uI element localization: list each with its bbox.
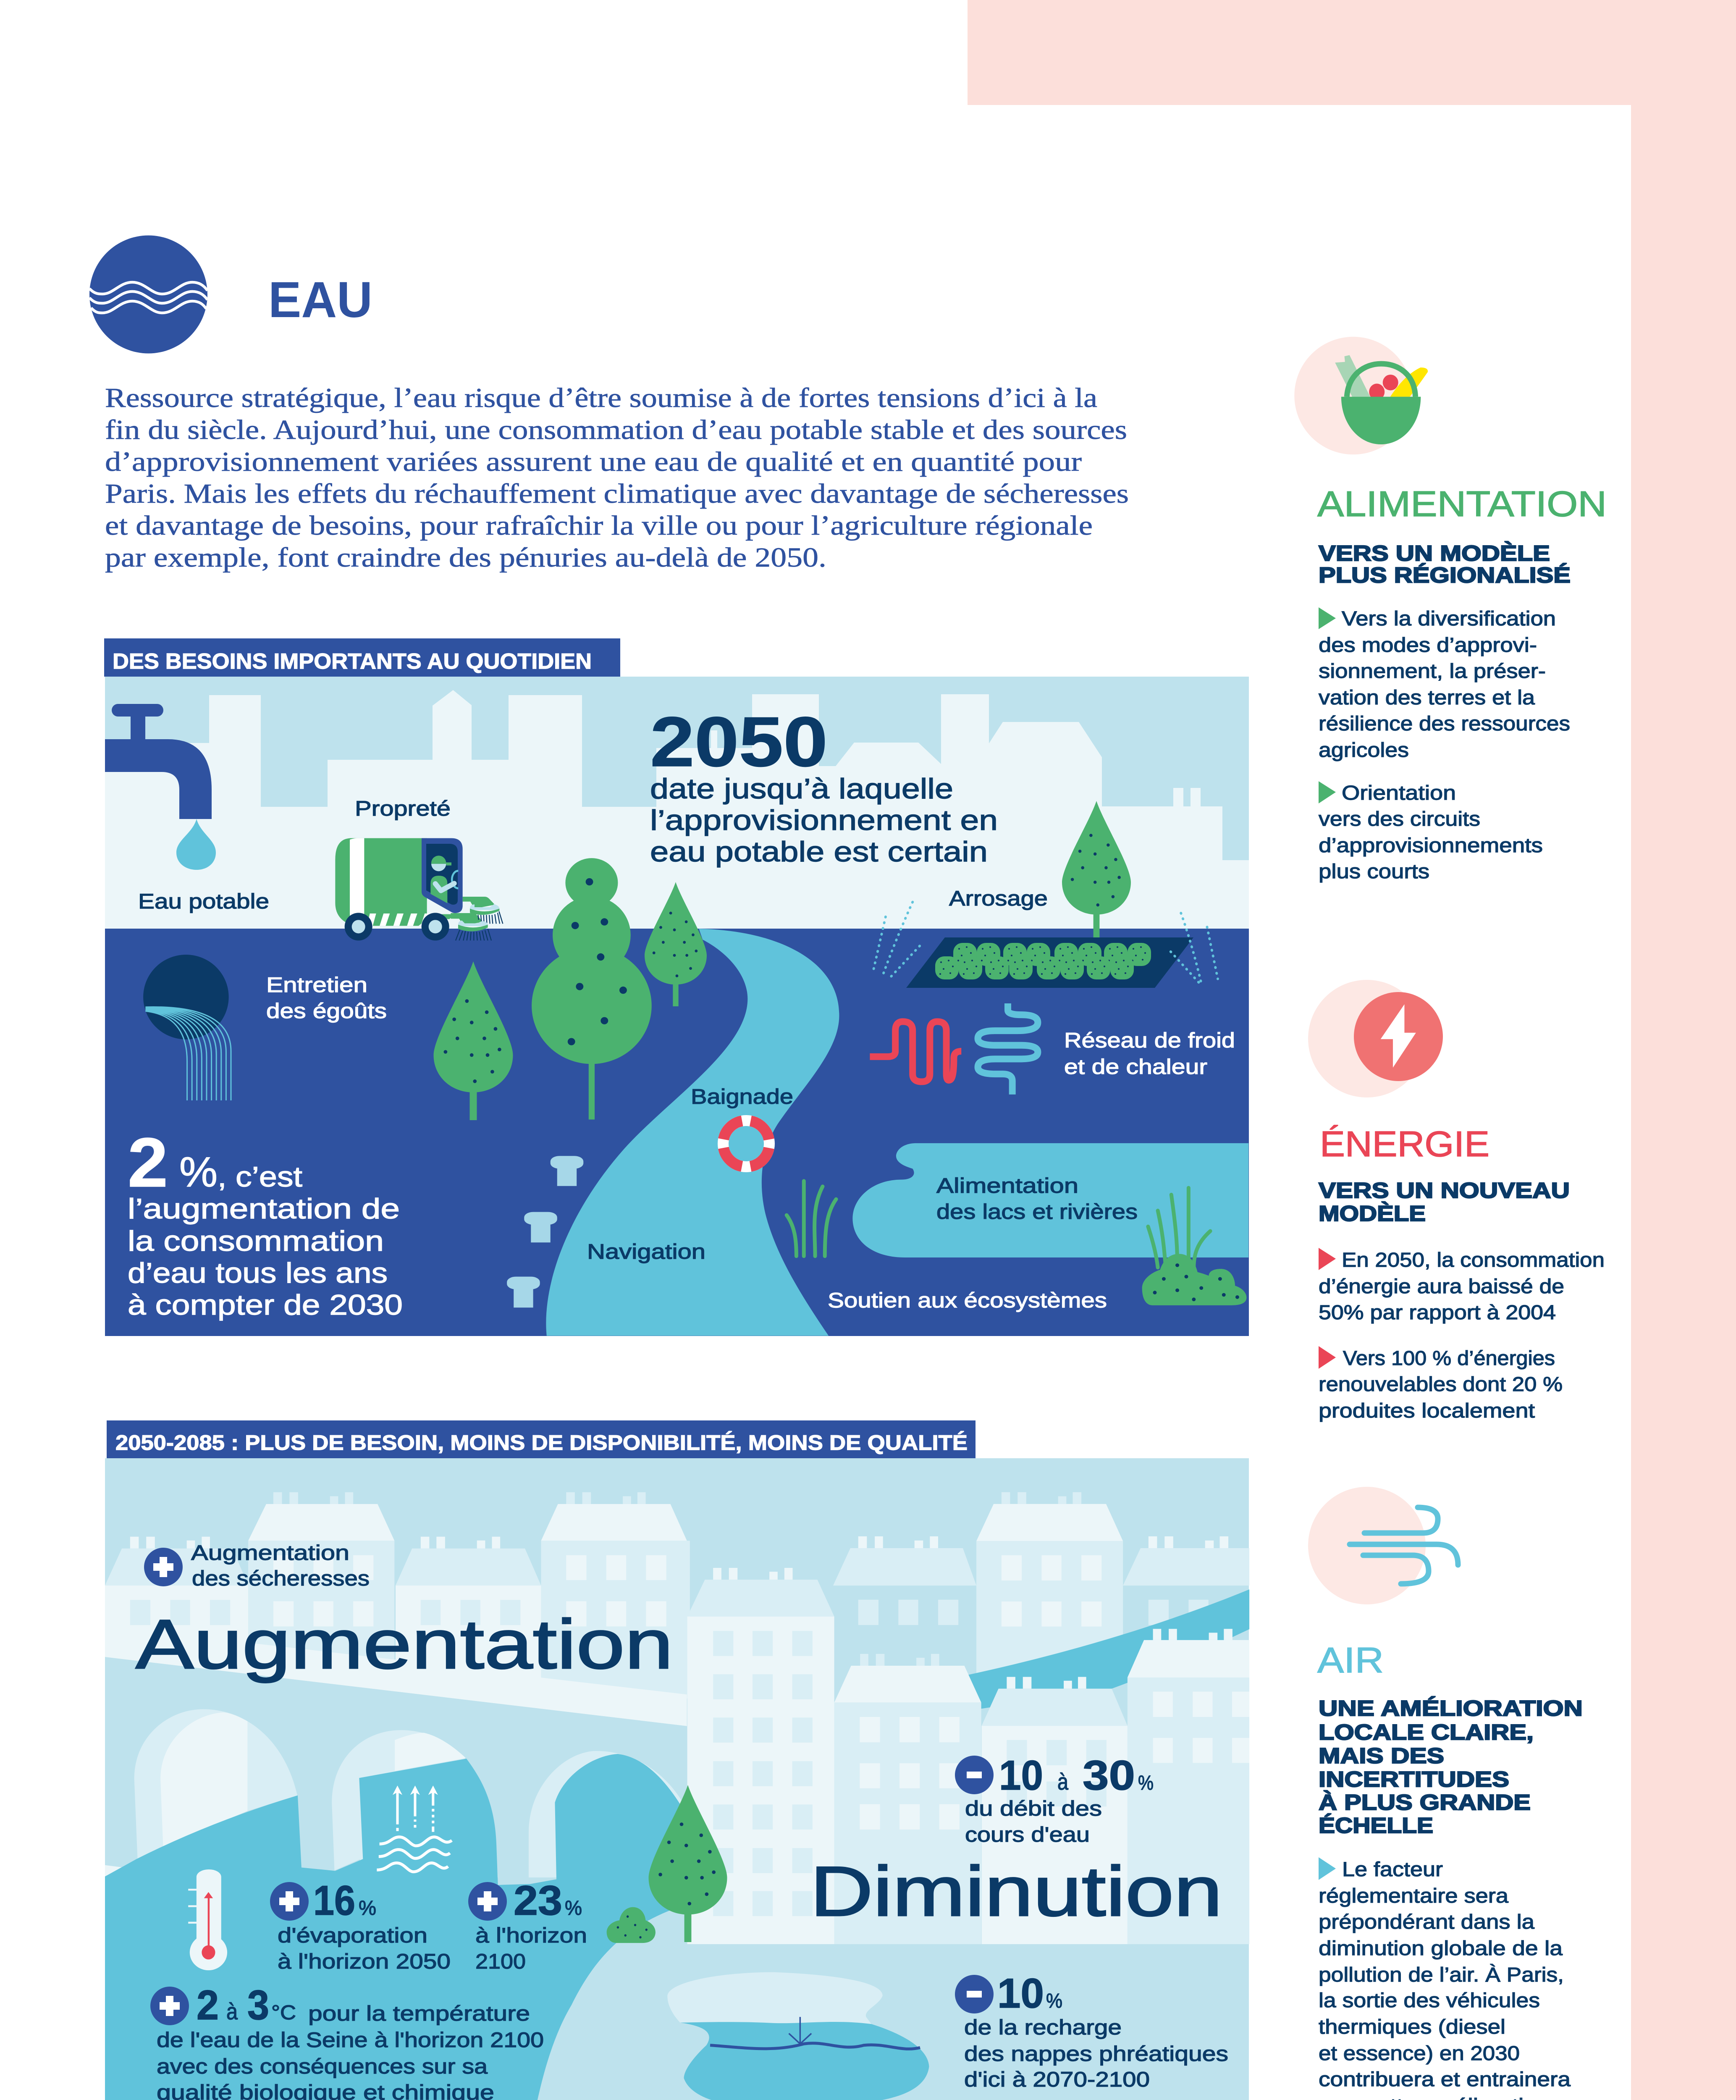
- label: Entretien des égoûts: des égoûts: [266, 999, 387, 1023]
- stat: augmentation des sécheresses: des sécheresses: [192, 1567, 370, 1590]
- river: [546, 929, 839, 1336]
- stat: plus 23 %: %: [565, 1897, 582, 1919]
- stat: 2050: [650, 702, 998, 868]
- subheading: amélioration locale: UNE AMÉLIORATION: [1319, 1696, 1583, 1721]
- icon: water circle: [89, 235, 207, 354]
- bullet: facteur réglementaire: réglementaire sera: [1319, 1885, 1508, 1907]
- bullet: facteur réglementaire: la sortie des véhicules: [1319, 1990, 1540, 2012]
- bullet: consommation: 50% par rapport à 2004: [1319, 1302, 1556, 1324]
- stat: 2 % consumption: 2: [128, 1124, 168, 1202]
- stat: plus 2 à 3 °C: de l'eau de la Seine à l'horizon 2100: [157, 2028, 544, 2052]
- stat: plus 16 %: d'évaporation: [278, 1924, 427, 1947]
- stat: 2 % consumption: la consommation: [128, 1225, 384, 1257]
- intro paragraph: Paris. Mais les effets du réchauffement climatique avec davantage de sécheresses: [105, 478, 1129, 509]
- bullet: consommation: En 2050, la consommation: [1342, 1249, 1605, 1271]
- stat: moins 10 %: d'ici à 2070-2100: [964, 2068, 1150, 2091]
- subheading: nouveau modèle: [1319, 1179, 1570, 1226]
- section header: 2050-2085: [107, 1420, 976, 1458]
- subheading: nouveau modèle: MODÈLE: [1319, 1202, 1426, 1226]
- intro paragraph: et davantage de besoins, pour rafraîchir la ville ou pour l’agriculture régionale: [105, 510, 1093, 541]
- trees: [433, 801, 1131, 1120]
- bullet: facteur réglementaire: pollution de l’air. À Paris,: [1319, 1964, 1564, 1986]
- bullet: diversification: [1319, 607, 1570, 761]
- stat: moins 10 %: %: [1046, 1990, 1062, 2012]
- icon: thermometer: [188, 1869, 227, 1970]
- bullet: renouvelables: [1319, 1346, 1563, 1422]
- icon: water drop: [176, 819, 216, 870]
- label: Réseau de froid et de chaleur: [1064, 1029, 1235, 1079]
- icon: mooring bollards: [507, 1156, 583, 1307]
- bullet: circuits courts: Orientation: [1342, 782, 1456, 804]
- icon: wind: [1308, 1487, 1458, 1604]
- icon: bush: [607, 1907, 656, 1943]
- bullet: facteur réglementaire: prépondérant dans la: [1319, 1911, 1534, 1933]
- stat: plus 2 à 3 °C: 2: [197, 1982, 219, 2028]
- label: Réseau de froid et de chaleur: et de chaleur: [1064, 1055, 1207, 1079]
- bullet: diversification: résilience des ressources: [1319, 713, 1570, 735]
- intro paragraph: par exemple, font craindre des pénuries au-delà de 2050.: [105, 542, 826, 573]
- stat: plus 16 %: à l'horizon 2050: [278, 1950, 451, 1973]
- icon: lightning bolt: [1308, 980, 1443, 1097]
- bullet: circuits courts: plus courts: [1319, 861, 1429, 883]
- stat: plus 2 à 3 °C: [150, 1982, 544, 2100]
- stat: augmentation des sécheresses: Augmentation: [191, 1541, 349, 1564]
- stat: plus 23 %: [468, 1877, 587, 1973]
- subheading: amélioration locale: LOCALE CLAIRE,: [1319, 1720, 1534, 1745]
- bridge deck and arches: [105, 1627, 690, 1940]
- heading: Augmentation: Augmentation: [136, 1606, 673, 1683]
- section header: besoins au quotidien: DES BESOINS IMPORTANTS AU QUOTIDIEN: [113, 649, 592, 674]
- stat: moins 10 à 30 %: [955, 1752, 1154, 1846]
- bullet: diversification: vation des terres et la: [1319, 687, 1535, 709]
- bullet: diversification: agricoles: [1319, 739, 1409, 761]
- stat: moins 10 %: 10: [997, 1970, 1044, 2016]
- stat: moins 10 %: de la recharge: [964, 2016, 1122, 2039]
- label: Entretien des égoûts: [266, 973, 387, 1023]
- stat: 2050: l’approvisionnement en: [650, 804, 998, 836]
- stat: augmentation des sécheresses: [144, 1541, 370, 1590]
- ground: [105, 929, 1249, 1336]
- label: Baignade: Baignade: [691, 1085, 793, 1108]
- stat: moins 10 à 30 %: %: [1138, 1772, 1154, 1794]
- stat: moins 10 %: [955, 1970, 1228, 2091]
- subheading: modèle régionalisé: PLUS RÉGIONALISÉ: [1319, 563, 1571, 588]
- intro paragraph: fin du siècle. Aujourd’hui, une consommation d’eau potable stable et des sources: [105, 415, 1127, 445]
- stat: moins 10 à 30 %: à: [1057, 1769, 1068, 1795]
- stat: plus 23 %: à l'horizon: [475, 1924, 587, 1947]
- icon: reeds: [787, 1181, 836, 1256]
- label: Réseau de froid et de chaleur: Réseau de froid: [1064, 1029, 1235, 1052]
- subheading: modèle régionalisé: VERS UN MODÈLE: [1319, 541, 1550, 566]
- bullet: diversification: sionnement, la préser-: [1319, 660, 1546, 682]
- panel: besoins au quotidien: [105, 677, 1249, 1336]
- bullet: renouvelables: Vers 100 % d’énergies: [1343, 1347, 1555, 1370]
- stat: plus 2 à 3 °C: avec des conséquences sur sa: [157, 2055, 488, 2078]
- subheading: amélioration locale: MAIS DES: [1319, 1744, 1444, 1768]
- buildings right: [687, 1492, 1249, 1944]
- stat: plus 23 %: 2100: [475, 1950, 526, 1973]
- label: Navigation: Navigation: [587, 1240, 705, 1263]
- stat: plus 2 à 3 °C: °C: [271, 2002, 296, 2024]
- label: Arrosage: Arrosage: [949, 887, 1048, 910]
- label: Alimentation des lacs et rivières: Alimentation: [936, 1174, 1078, 1197]
- label: Eau potable: Eau potable: [138, 890, 269, 913]
- panel: air: [1308, 1487, 1583, 2100]
- label: Alimentation des lacs et rivières: des lacs et rivières: [936, 1200, 1138, 1223]
- intro paragraph: d’approvisionnement variées assurent une eau de qualité et en quantité pour: [105, 446, 1082, 477]
- label: Alimentation des lacs et rivières: [936, 1174, 1138, 1223]
- section header: 2050-2085: 2050-2085 : PLUS DE BESOIN, MOINS DE DISPONIBILITÉ, MOINS DE QUALITÉ: [115, 1431, 968, 1454]
- panel: énergie: [1308, 980, 1605, 1422]
- stat: plus 16 %: %: [359, 1897, 376, 1919]
- bullet: facteur réglementaire: contribuera et entrainera: [1319, 2068, 1571, 2091]
- icon: street sweeper truck: [335, 838, 503, 940]
- stat: 2 % consumption: , c’est: [218, 1161, 302, 1193]
- bullet: circuits courts: d’approvisionnements: [1319, 835, 1543, 857]
- stat: plus 23 %: 23: [514, 1877, 562, 1924]
- icon: food basket: [1294, 337, 1428, 454]
- label: Entretien des égoûts: Entretien: [266, 973, 367, 997]
- icon: lifebuoy: [723, 1121, 769, 1167]
- intro paragraph: Ressource stratégique, l’eau risque d’être soumise à de fortes tensions d’ici à la: [105, 383, 1097, 413]
- panel: alimentation: [1294, 337, 1607, 883]
- icon: lake: [852, 1143, 1248, 1257]
- city skyline: [105, 690, 1249, 929]
- back row buildings left: [105, 1492, 690, 1698]
- stat: 2050: 2050: [650, 702, 828, 781]
- intro paragraph: [105, 383, 1129, 573]
- heading: Alimentation: ALIMENTATION: [1317, 484, 1607, 524]
- stat: moins 10 à 30 %: 10: [999, 1752, 1043, 1798]
- section header: besoins au quotidien: [104, 638, 620, 677]
- stat: plus 2 à 3 °C: à: [226, 1998, 238, 2024]
- bullet: facteur réglementaire: et essence) en 2030: [1319, 2042, 1520, 2065]
- subheading: nouveau modèle: VERS UN NOUVEAU: [1319, 1179, 1570, 1203]
- icon: reeds and bush: [1142, 1188, 1246, 1305]
- label: Soutien aux écosystèmes: Soutien aux écosystèmes: [828, 1289, 1107, 1312]
- heading: EAU: EAU: [268, 271, 372, 328]
- stat: plus 2 à 3 °C: 3: [247, 1982, 269, 2028]
- bullet: consommation: [1319, 1248, 1605, 1324]
- bullet: renouvelables: produites localement: [1319, 1400, 1535, 1422]
- subheading: amélioration locale: [1319, 1696, 1583, 1838]
- stat: plus 2 à 3 °C: pour la température: [308, 2002, 530, 2025]
- bullet: circuits courts: [1319, 781, 1543, 883]
- icon: aquifer: [667, 1972, 929, 2100]
- heading: Énergie: ÉNERGIE: [1320, 1124, 1489, 1164]
- stat: plus 16 %: [270, 1877, 451, 1973]
- stat: moins 10 à 30 %: 30: [1083, 1752, 1135, 1798]
- stat: 2 % consumption: %: [179, 1149, 218, 1196]
- bullet: diversification: des modes d’approvi-: [1319, 634, 1537, 656]
- label: Propreté: Propreté: [355, 797, 451, 820]
- bullet: facteur réglementaire: [1319, 1857, 1571, 2100]
- icon: tap: [105, 704, 212, 819]
- stat: 2050: date jusqu’à laquelle: [650, 773, 953, 805]
- icon: tree: [648, 1785, 727, 1942]
- heading: Diminution: Diminution: [810, 1852, 1222, 1931]
- bullet: diversification: Vers la diversification: [1342, 608, 1556, 630]
- stat: 2 % consumption: d’eau tous les ans: [128, 1257, 388, 1289]
- bullet: consommation: d’énergie aura baissé de: [1319, 1276, 1564, 1298]
- icon: heating and cooling pipes: [870, 1003, 1038, 1095]
- bullet: circuits courts: vers des circuits: [1319, 808, 1480, 830]
- icon: irrigated bed: [874, 897, 1218, 988]
- stat: moins 10 à 30 %: du débit des: [965, 1797, 1102, 1820]
- subheading: amélioration locale: INCERTITUDES: [1319, 1767, 1509, 1792]
- subheading: modèle régionalisé: [1319, 541, 1571, 588]
- stat: moins 10 à 30 %: cours d'eau: [965, 1823, 1090, 1846]
- stat: 2 % consumption: à compter de 2030: [128, 1289, 403, 1321]
- bullet: facteur réglementaire: thermiques (diesel: [1319, 2016, 1505, 2038]
- stat: moins 10 %: des nappes phréatiques: [964, 2042, 1228, 2066]
- bullet: facteur réglementaire: Le facteur: [1342, 1858, 1443, 1881]
- panel: 2050-2085: [105, 1458, 1249, 2100]
- subheading: amélioration locale: ÉCHELLE: [1319, 1814, 1433, 1838]
- icon: evaporation arrows and waves: [377, 1785, 452, 1872]
- bullet: renouvelables: renouvelables dont 20 %: [1319, 1373, 1563, 1396]
- icon: sewer outlet: [143, 955, 231, 1100]
- stat: 2 % consumption: l’augmentation de: [128, 1193, 400, 1225]
- river: [105, 1754, 687, 2100]
- subheading: amélioration locale: À PLUS GRANDE: [1319, 1790, 1531, 1815]
- heading: Air: AIR: [1317, 1641, 1384, 1680]
- bullet: facteur réglementaire: diminution globale de la: [1319, 1937, 1563, 1960]
- stat: plus 16 %: 16: [313, 1877, 355, 1924]
- stat: 2 % consumption: [128, 1124, 403, 1321]
- stat: 2050: eau potable est certain: [650, 836, 988, 868]
